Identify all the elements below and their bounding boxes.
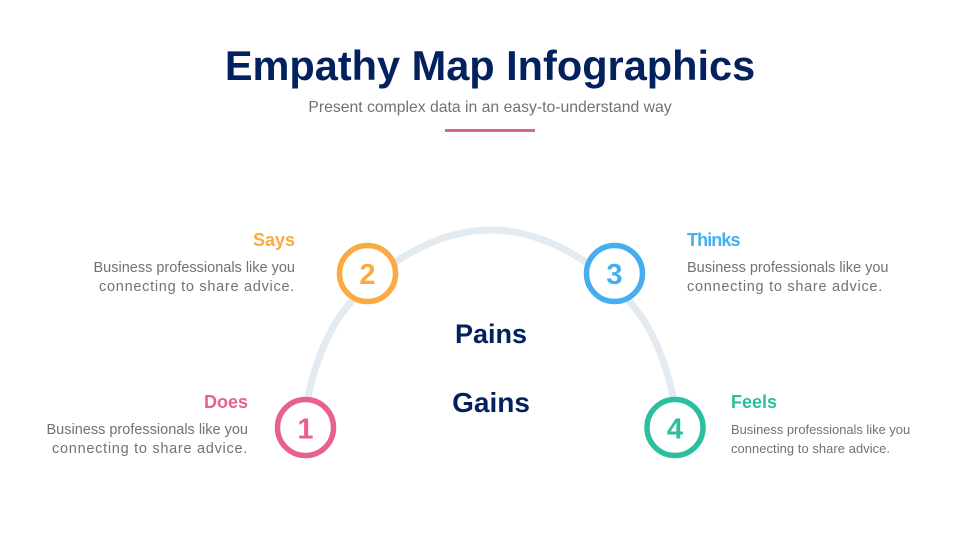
circle 1: 1 — [297, 414, 314, 446]
accent underline — [445, 129, 535, 132]
circle 4 — [647, 400, 703, 456]
text: thinks: Business professionals like you — [687, 260, 888, 276]
circle 2 — [340, 246, 396, 302]
circle 3: 3 — [606, 259, 623, 291]
text: thinks — [687, 260, 888, 294]
subtitle: Present complex data in an easy-to-understand way — [308, 99, 672, 116]
center label: gains: Gains — [452, 387, 530, 418]
heading: does: Does — [204, 392, 248, 412]
text: says — [94, 260, 295, 294]
circle 4: 4 — [667, 414, 683, 446]
circle 1 — [278, 400, 334, 456]
heading: feels: Feels — [731, 392, 777, 412]
text: feels: connecting to share advice. — [731, 440, 890, 456]
heading: thinks: Thinks — [687, 230, 740, 250]
text: feels: Business professionals like you — [731, 422, 910, 437]
text: says: Business professionals like you — [94, 260, 295, 276]
text: says: connecting to share advice. — [99, 278, 295, 294]
text: does: connecting to share advice. — [52, 440, 248, 456]
heading: says: Says — [253, 230, 295, 250]
text: does: Business professionals like you — [46, 422, 248, 438]
text: thinks: connecting to share advice. — [687, 278, 883, 294]
circle 2: 2 — [359, 259, 376, 291]
circle 3 — [586, 246, 642, 302]
title: Empathy Map Infographics — [225, 42, 755, 89]
text: feels — [731, 422, 910, 456]
text: does — [46, 422, 248, 456]
center label: pains: Pains — [455, 319, 527, 349]
